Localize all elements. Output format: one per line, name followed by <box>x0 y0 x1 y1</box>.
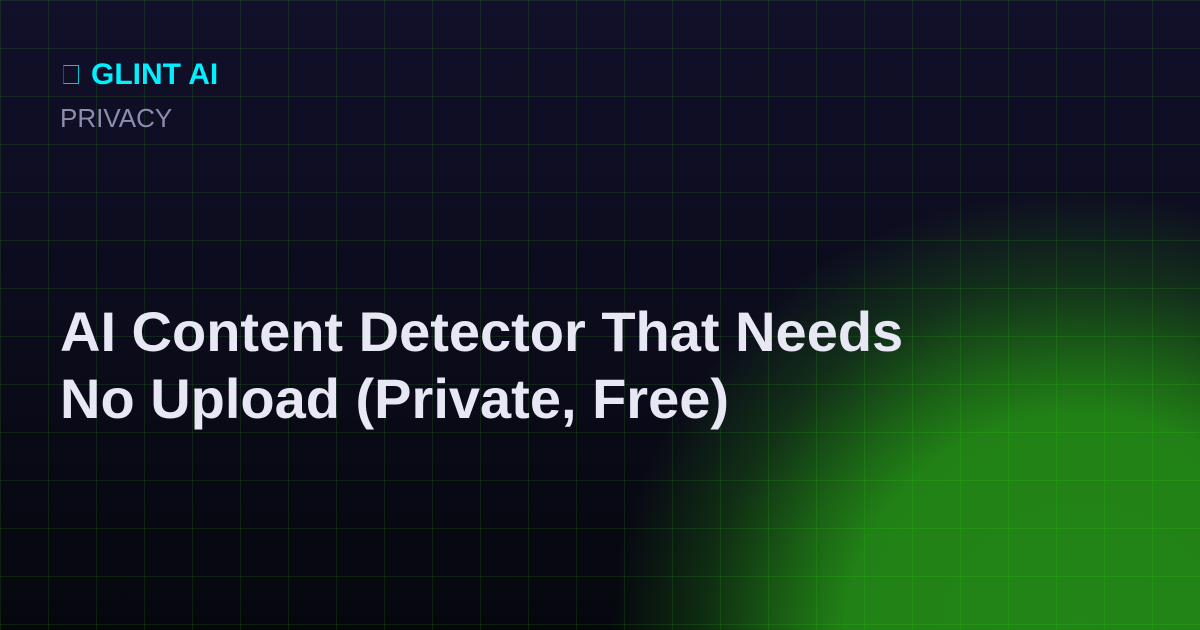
icon: missing glyph box <box>63 65 79 84</box>
title: AI Content Detector That Needs <box>60 300 903 363</box>
title <box>60 300 903 430</box>
title: No Upload (Private, Free) <box>60 367 729 430</box>
brand name: GLINT AI <box>91 58 218 91</box>
logo <box>63 58 218 91</box>
category label: PRIVACY <box>60 103 172 133</box>
